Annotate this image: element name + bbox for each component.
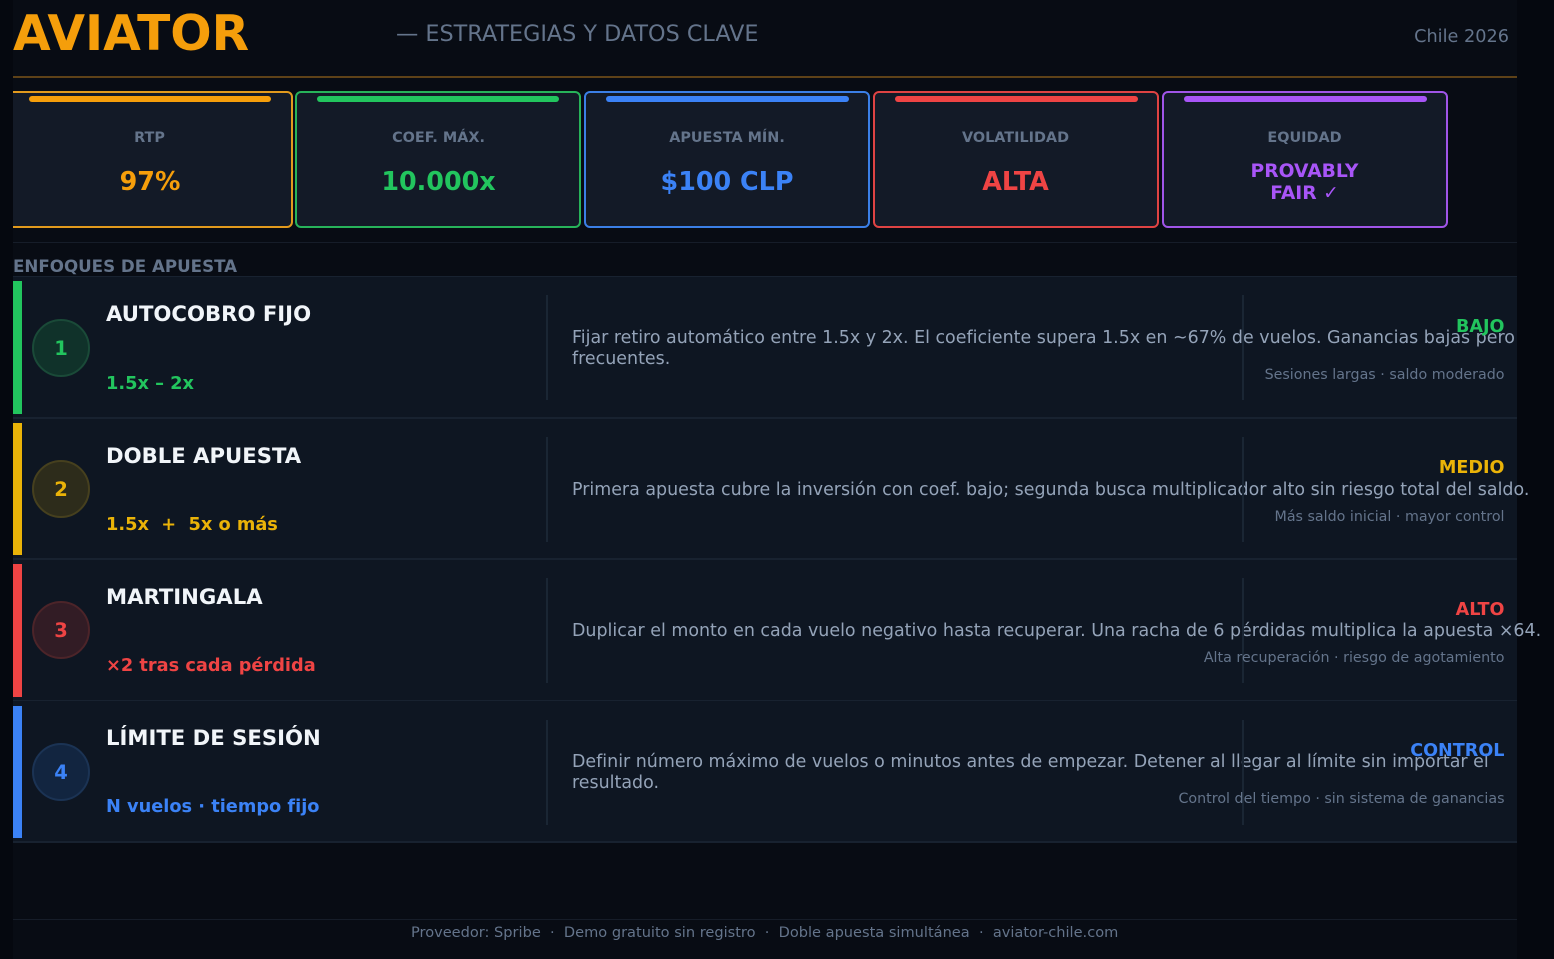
strategy name: DOBLE APUESTA xyxy=(106,443,301,468)
description: Definir número máximo de vuelos o minutos antes de empezar. Detener al llegar al límite sin importar el resultado. xyxy=(572,752,1489,793)
stat card: RTP: RTP xyxy=(134,130,165,146)
note: Más saldo inicial · mayor control xyxy=(1275,509,1504,525)
stat card: RTP xyxy=(13,91,293,228)
stat card: coeficiente máximo: 10.000x xyxy=(381,166,496,196)
panel: strategy 2 xyxy=(13,419,1529,560)
subtitle: — ESTRATEGIAS Y DATOS CLAVE xyxy=(396,21,758,47)
coefficient: ×2 tras cada pérdida xyxy=(106,656,316,676)
number badge: 1 xyxy=(54,337,68,360)
strategy name: LÍMITE DE SESIÓN xyxy=(106,725,321,750)
stat card: equidad: PROVABLY xyxy=(1251,161,1358,182)
description: Primera apuesta cubre la inversión con coef. bajo; segunda busca multiplicador alto sin riesgo total del saldo. xyxy=(572,480,1529,500)
note: Control del tiempo · sin sistema de ganancias xyxy=(1178,791,1504,807)
number badge: 2 xyxy=(54,478,68,501)
risk level: BAJO xyxy=(1456,317,1504,337)
strategy name: MARTINGALA xyxy=(106,584,263,609)
description: Duplicar el monto en cada vuelo negativo hasta recuperar. Una racha de 6 pérdidas multiplica la apuesta ×64. xyxy=(572,621,1541,641)
number badge: 3 xyxy=(54,619,68,642)
number badge xyxy=(32,601,90,659)
stat card: equidad: EQUIDAD xyxy=(1267,130,1342,146)
note: Sesiones largas · saldo moderado xyxy=(1265,367,1504,383)
strategy name: AUTOCOBRO FIJO xyxy=(106,301,311,326)
risk level: CONTROL xyxy=(1410,741,1504,761)
stat card: volatilidad xyxy=(873,91,1159,228)
coefficient: N vuelos · tiempo fijo xyxy=(106,797,320,817)
title: AVIATOR xyxy=(13,6,249,62)
panel: key stats xyxy=(13,91,1448,228)
section heading: ENFOQUES DE APUESTA xyxy=(13,256,237,276)
number badge: 4 xyxy=(54,761,68,784)
stat card: volatilidad: VOLATILIDAD xyxy=(962,130,1069,146)
stat card: apuesta mínima: APUESTA MÍN. xyxy=(669,130,785,146)
stat card: apuesta mínima xyxy=(584,91,870,228)
stat card: RTP: 97% xyxy=(120,166,180,196)
stat card: coeficiente máximo: COEF. MÁX. xyxy=(392,130,485,146)
panel: strategy 1 xyxy=(13,276,1517,419)
panel: strategy 3 xyxy=(13,560,1541,701)
risk level: MEDIO xyxy=(1439,458,1504,478)
number badge xyxy=(32,319,90,377)
risk level: ALTO xyxy=(1456,600,1504,620)
stat card: equidad: FAIR ✓ xyxy=(1270,183,1339,204)
stat card: apuesta mínima: $100 CLP xyxy=(661,166,793,196)
coefficient: 1.5x + 5x o más xyxy=(106,515,278,535)
stat card: equidad xyxy=(1162,91,1448,228)
footer: Proveedor: Spribe · Demo gratuito sin registro · Doble apuesta simultánea · aviator-chile.com xyxy=(411,924,1118,941)
coefficient: 1.5x – 2x xyxy=(106,374,194,394)
panel: strategy 4 xyxy=(13,701,1517,843)
number badge xyxy=(32,743,90,801)
location and year: Chile 2026 xyxy=(1414,27,1509,47)
description: Fijar retiro automático entre 1.5x y 2x. El coeficiente supera 1.5x en ~67% de vuelos. Ganancias bajas pero frecuentes. xyxy=(572,328,1515,369)
stat card: volatilidad: ALTA xyxy=(982,166,1049,196)
stat card: coeficiente máximo xyxy=(295,91,581,228)
note: Alta recuperación · riesgo de agotamiento xyxy=(1204,650,1504,666)
number badge xyxy=(32,460,90,518)
